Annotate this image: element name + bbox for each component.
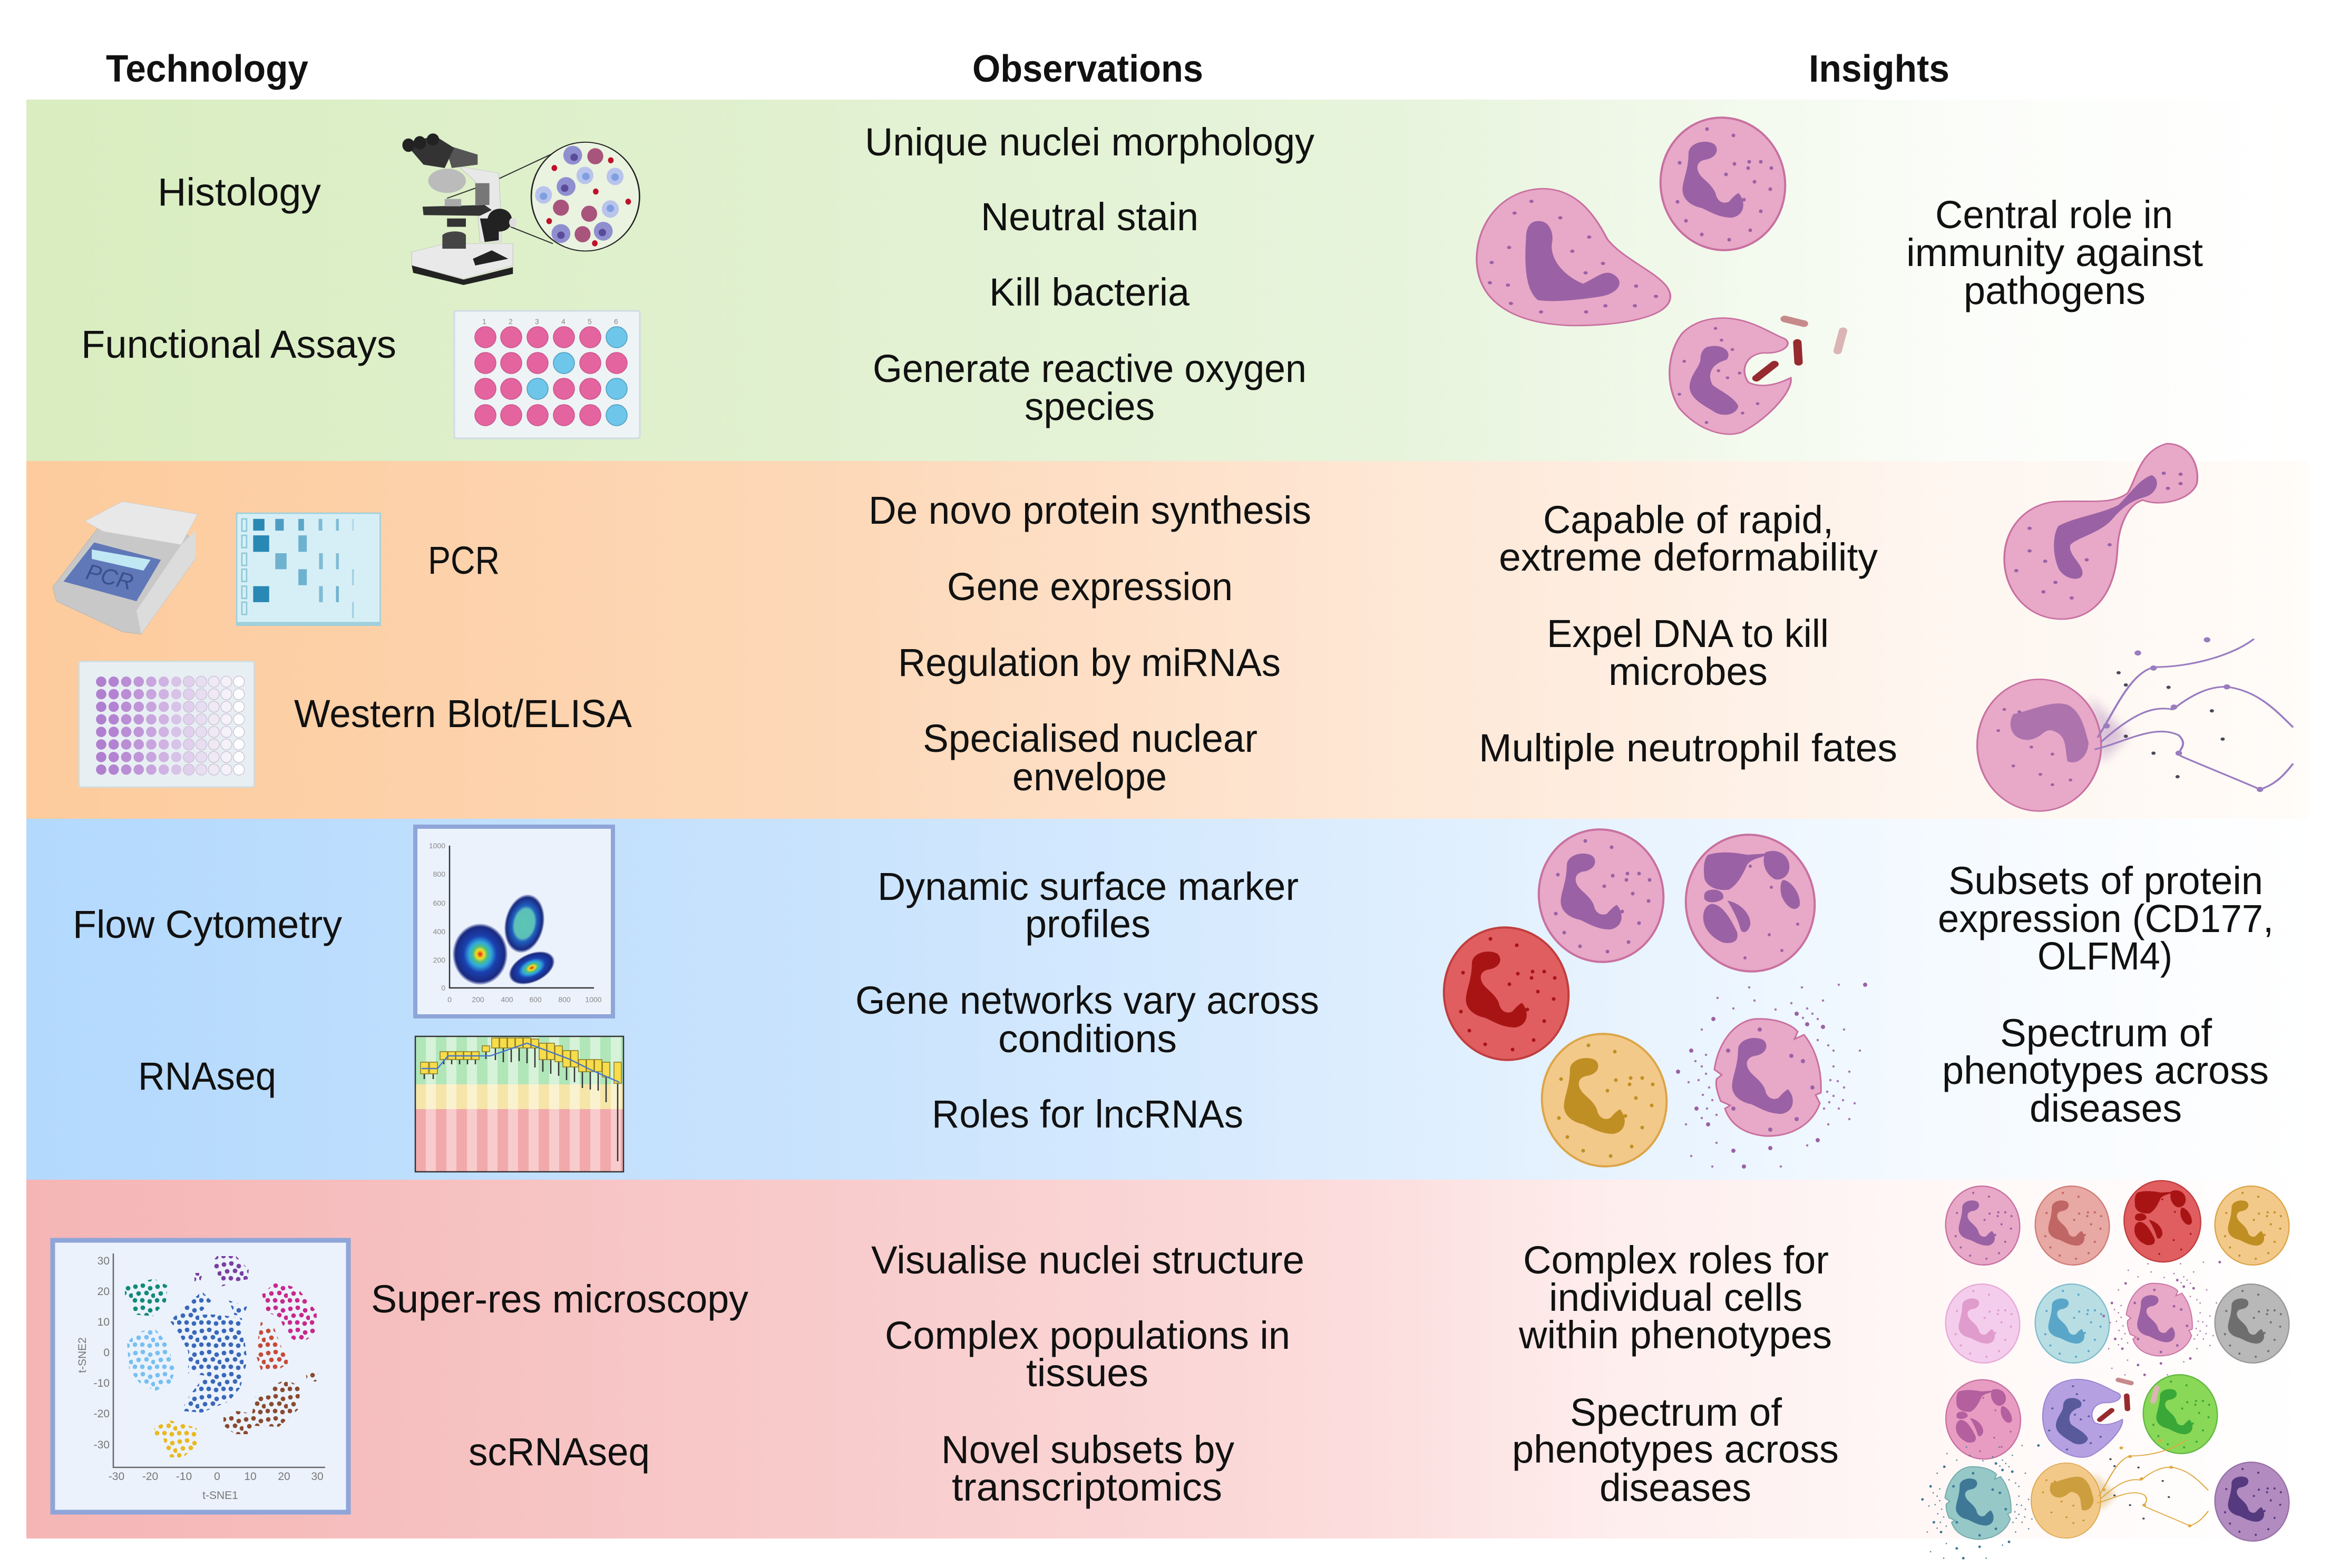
chart: t-SNE cluster plot: 20 <box>278 1471 290 1483</box>
observations: orange band: Regulation by miRNAs <box>898 641 1281 684</box>
heading: Observations: Observations <box>972 48 1203 90</box>
chart: t-SNE cluster plot: 20 <box>97 1286 110 1298</box>
icon: 24-well plate: 2 <box>509 317 513 326</box>
insights: blue band: OLFM4) <box>2037 934 2172 978</box>
label: PCR: PCR <box>428 538 500 582</box>
chart: flow cytometry scatter: 600 <box>529 995 542 1004</box>
icon: pink neutrophil <box>1528 819 1674 972</box>
icon grid: neutrophil phenotypes <box>1923 1174 2295 1558</box>
observations: orange band: Gene expression <box>947 565 1233 609</box>
icon: 24-well plate: 4 <box>561 317 565 326</box>
insights: blue band: diseases <box>2030 1086 2182 1130</box>
icon: red neutrophil <box>1434 917 1579 1070</box>
chart: t-SNE cluster plot: -20 <box>94 1408 110 1420</box>
insights: orange band: extreme deformability <box>1499 535 1878 579</box>
insights: orange band: Capable of rapid, <box>1543 498 1834 542</box>
chart: flow cytometry scatter: 200 <box>433 956 445 964</box>
panel: red band, super-resolution and scRNAseq <box>26 1174 2308 1558</box>
insights: orange band <box>1479 498 1897 770</box>
panel: green band, histology and functional assays <box>26 100 2308 461</box>
insights: blue band: expression (CD177, <box>1938 897 2274 940</box>
icon: 24-well plate: 3 <box>535 317 539 326</box>
observations: orange band: envelope <box>1012 755 1167 799</box>
label: Super-res microscopy: Super-res microscopy <box>371 1277 748 1321</box>
label: Histology: Histology <box>158 170 321 214</box>
observations: green band: Unique nuclei morphology <box>865 120 1314 164</box>
icon: electrophoresis gel <box>237 513 380 626</box>
insight: central role: immunity against <box>1906 231 2203 275</box>
icon: neutrophil squeezing, deformability <box>2004 444 2197 619</box>
label: Functional Assays: Functional Assays <box>81 322 396 366</box>
icon: degranulating neutrophil <box>1678 985 1865 1167</box>
icon: microscope with magnified blood smear <box>402 133 639 285</box>
observations: red band: Novel subsets by <box>941 1428 1234 1472</box>
chart: flow cytometry scatter: 200 <box>472 995 484 1004</box>
insights: orange band: Expel DNA to kill <box>1547 612 1829 655</box>
icon: multi-lobed neutrophil <box>1675 825 1826 982</box>
label: Flow Cytometry: Flow Cytometry <box>73 903 342 946</box>
observations: red band: Visualise nuclei structure <box>871 1238 1304 1282</box>
insights: blue band <box>1938 859 2274 1130</box>
chart: flow cytometry scatter: 0 <box>447 995 452 1004</box>
chart: flow cytometry scatter <box>415 827 613 1016</box>
chart: sequence quality box plot <box>415 1036 623 1172</box>
observations: orange band <box>869 488 1311 799</box>
label: RNAseq: RNAseq <box>138 1054 276 1098</box>
insight: central role: Central role in <box>1935 193 2173 237</box>
icon: 24-well plate: 6 <box>614 317 618 326</box>
chart: flow cytometry scatter: 800 <box>558 995 571 1004</box>
insights: red band: individual cells <box>1549 1276 1802 1319</box>
observations: green band: species <box>1025 385 1155 428</box>
insights: blue band: phenotypes across <box>1942 1048 2269 1092</box>
observations: red band: Complex populations in <box>885 1314 1290 1357</box>
insights: orange band: microbes <box>1608 650 1768 693</box>
chart: flow cytometry scatter: 0 <box>441 984 445 992</box>
insights: orange band: Multiple neutrophil fates <box>1479 726 1897 770</box>
observations: red band: tissues <box>1026 1351 1148 1395</box>
insights: red band: phenotypes across <box>1512 1427 1839 1471</box>
observations: blue band <box>855 865 1319 1136</box>
chart: t-SNE cluster plot: -30 <box>109 1471 124 1483</box>
chart: t-SNE cluster plot: 0 <box>103 1347 110 1359</box>
observations: blue band: Gene networks vary across <box>855 978 1319 1022</box>
heading: Technology: Technology <box>106 48 308 90</box>
chart: t-SNE cluster plot: 30 <box>311 1471 324 1483</box>
chart: flow cytometry scatter: 1000 <box>429 841 445 850</box>
panel: blue band, flow cytometry and RNAseq <box>26 819 2308 1180</box>
chart: t-SNE cluster plot: -10 <box>176 1471 192 1483</box>
chart: t-SNE cluster plot: t-SNE2 <box>76 1337 89 1373</box>
insights: red band: Complex roles for <box>1523 1238 1829 1282</box>
label: Western Blot/ELISA: Western Blot/ELISA <box>294 692 632 736</box>
insights: red band: within phenotypes <box>1518 1313 1832 1357</box>
chart: flow cytometry scatter: 400 <box>433 927 445 936</box>
icon: 96-well ELISA plate <box>79 661 254 787</box>
chart: flow cytometry scatter: 1000 <box>585 995 602 1004</box>
chart: t-SNE cluster plot: 30 <box>97 1255 110 1267</box>
observations: green band: Generate reactive oxygen <box>873 347 1306 390</box>
observations: blue band: profiles <box>1025 902 1150 946</box>
icon: neutrophil, amoeboid <box>1477 189 1670 326</box>
observations: red band <box>871 1238 1304 1509</box>
chart: t-SNE cluster plot <box>53 1240 348 1512</box>
chart: t-SNE cluster plot: 0 <box>214 1471 220 1483</box>
insight: central role <box>1906 193 2203 312</box>
icon: 24-well plate: 5 <box>588 317 592 326</box>
icon: yellow neutrophil <box>1532 1024 1677 1177</box>
chart: t-SNE cluster plot: 10 <box>97 1316 110 1328</box>
observations: blue band: conditions <box>998 1017 1177 1061</box>
insights: blue band: Subsets of protein <box>1948 859 2263 903</box>
chart: t-SNE cluster plot: -30 <box>94 1439 110 1451</box>
insights: red band: diseases <box>1600 1466 1751 1510</box>
icon: 24-well plate: 1 <box>482 317 486 326</box>
observations: green band <box>865 120 1314 428</box>
chart: flow cytometry scatter: 600 <box>433 899 445 907</box>
icon: PCR machine: PCR <box>83 559 136 595</box>
observations: red band: transcriptomics <box>952 1465 1222 1509</box>
heading: Insights: Insights <box>1809 48 1949 90</box>
observations: green band: Neutral stain <box>981 195 1198 239</box>
insights: red band <box>1512 1238 1839 1510</box>
observations: blue band: Roles for lncRNAs <box>932 1092 1243 1136</box>
icon: PCR machine <box>53 502 198 634</box>
insights: blue band: Spectrum of <box>2000 1011 2212 1055</box>
insight: central role: pathogens <box>1964 269 2146 312</box>
observations: orange band: De novo protein synthesis <box>869 488 1311 532</box>
label: scRNAseq: scRNAseq <box>469 1430 650 1474</box>
observations: green band: Kill bacteria <box>989 270 1190 314</box>
observations: blue band: Dynamic surface marker <box>877 865 1299 908</box>
icon: neutrophil expelling DNA <box>1977 639 2293 811</box>
icon: 24-well plate <box>454 311 640 438</box>
icon: neutrophil, round <box>1650 107 1796 260</box>
insights: red band: Spectrum of <box>1570 1390 1782 1434</box>
chart: flow cytometry scatter: 800 <box>433 870 445 878</box>
chart: t-SNE cluster plot: t-SNE1 <box>202 1489 238 1502</box>
chart: t-SNE cluster plot: 10 <box>244 1471 257 1483</box>
panel: orange band, PCR and western blot <box>26 444 2308 819</box>
chart: t-SNE cluster plot: -10 <box>94 1377 110 1389</box>
chart: flow cytometry scatter: 400 <box>501 995 513 1004</box>
icon: neutrophil engulfing bacteria <box>1670 318 1843 434</box>
chart: t-SNE cluster plot: -20 <box>142 1471 158 1483</box>
observations: orange band: Specialised nuclear <box>923 717 1257 760</box>
